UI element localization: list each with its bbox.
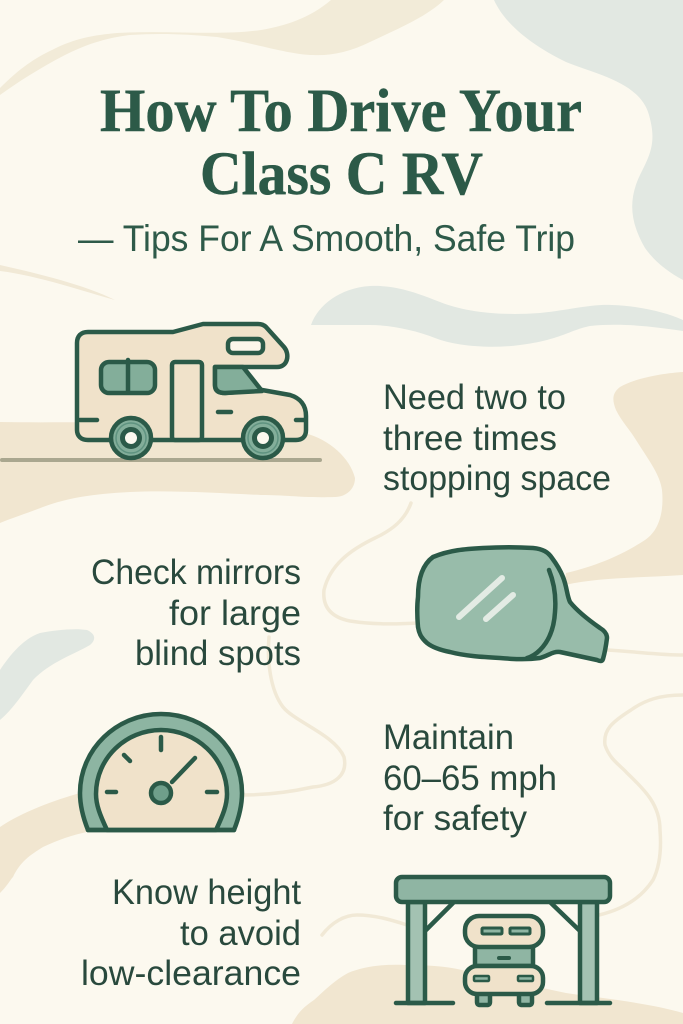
text: maintain speed: 60–65 mph [383,759,557,798]
text: stopping space: Need two to [383,378,566,417]
text: maintain speed: Maintain [383,718,514,757]
icon: speedometer gauge [80,714,242,830]
icon: low-clearance canopy with RV [396,877,610,1005]
text: maintain speed [383,718,557,838]
text: maintain speed: for safety [383,799,527,838]
icon: class C RV [0,324,322,462]
text: stopping space: three times [383,419,557,458]
text: check mirrors: for large [169,594,301,633]
icon: side mirror [417,547,607,661]
text: know height: low-clearance [81,954,301,993]
icon: rear wheel [111,418,151,458]
title [100,78,582,208]
text: check mirrors: blind spots [135,634,301,673]
text: know height: to avoid [180,914,301,953]
text: stopping space: stopping space [383,459,611,498]
text: check mirrors: Check mirrors [91,553,301,592]
subtitle: — Tips For A Smooth, Safe Trip [78,218,575,259]
icon: front wheel [243,418,283,458]
title: How To Drive Your [100,78,582,145]
text: check mirrors [91,553,301,673]
title: Class C RV [200,141,483,208]
text: know height: Know height [112,873,301,912]
text: know height [81,873,301,993]
text: stopping space [383,378,611,498]
